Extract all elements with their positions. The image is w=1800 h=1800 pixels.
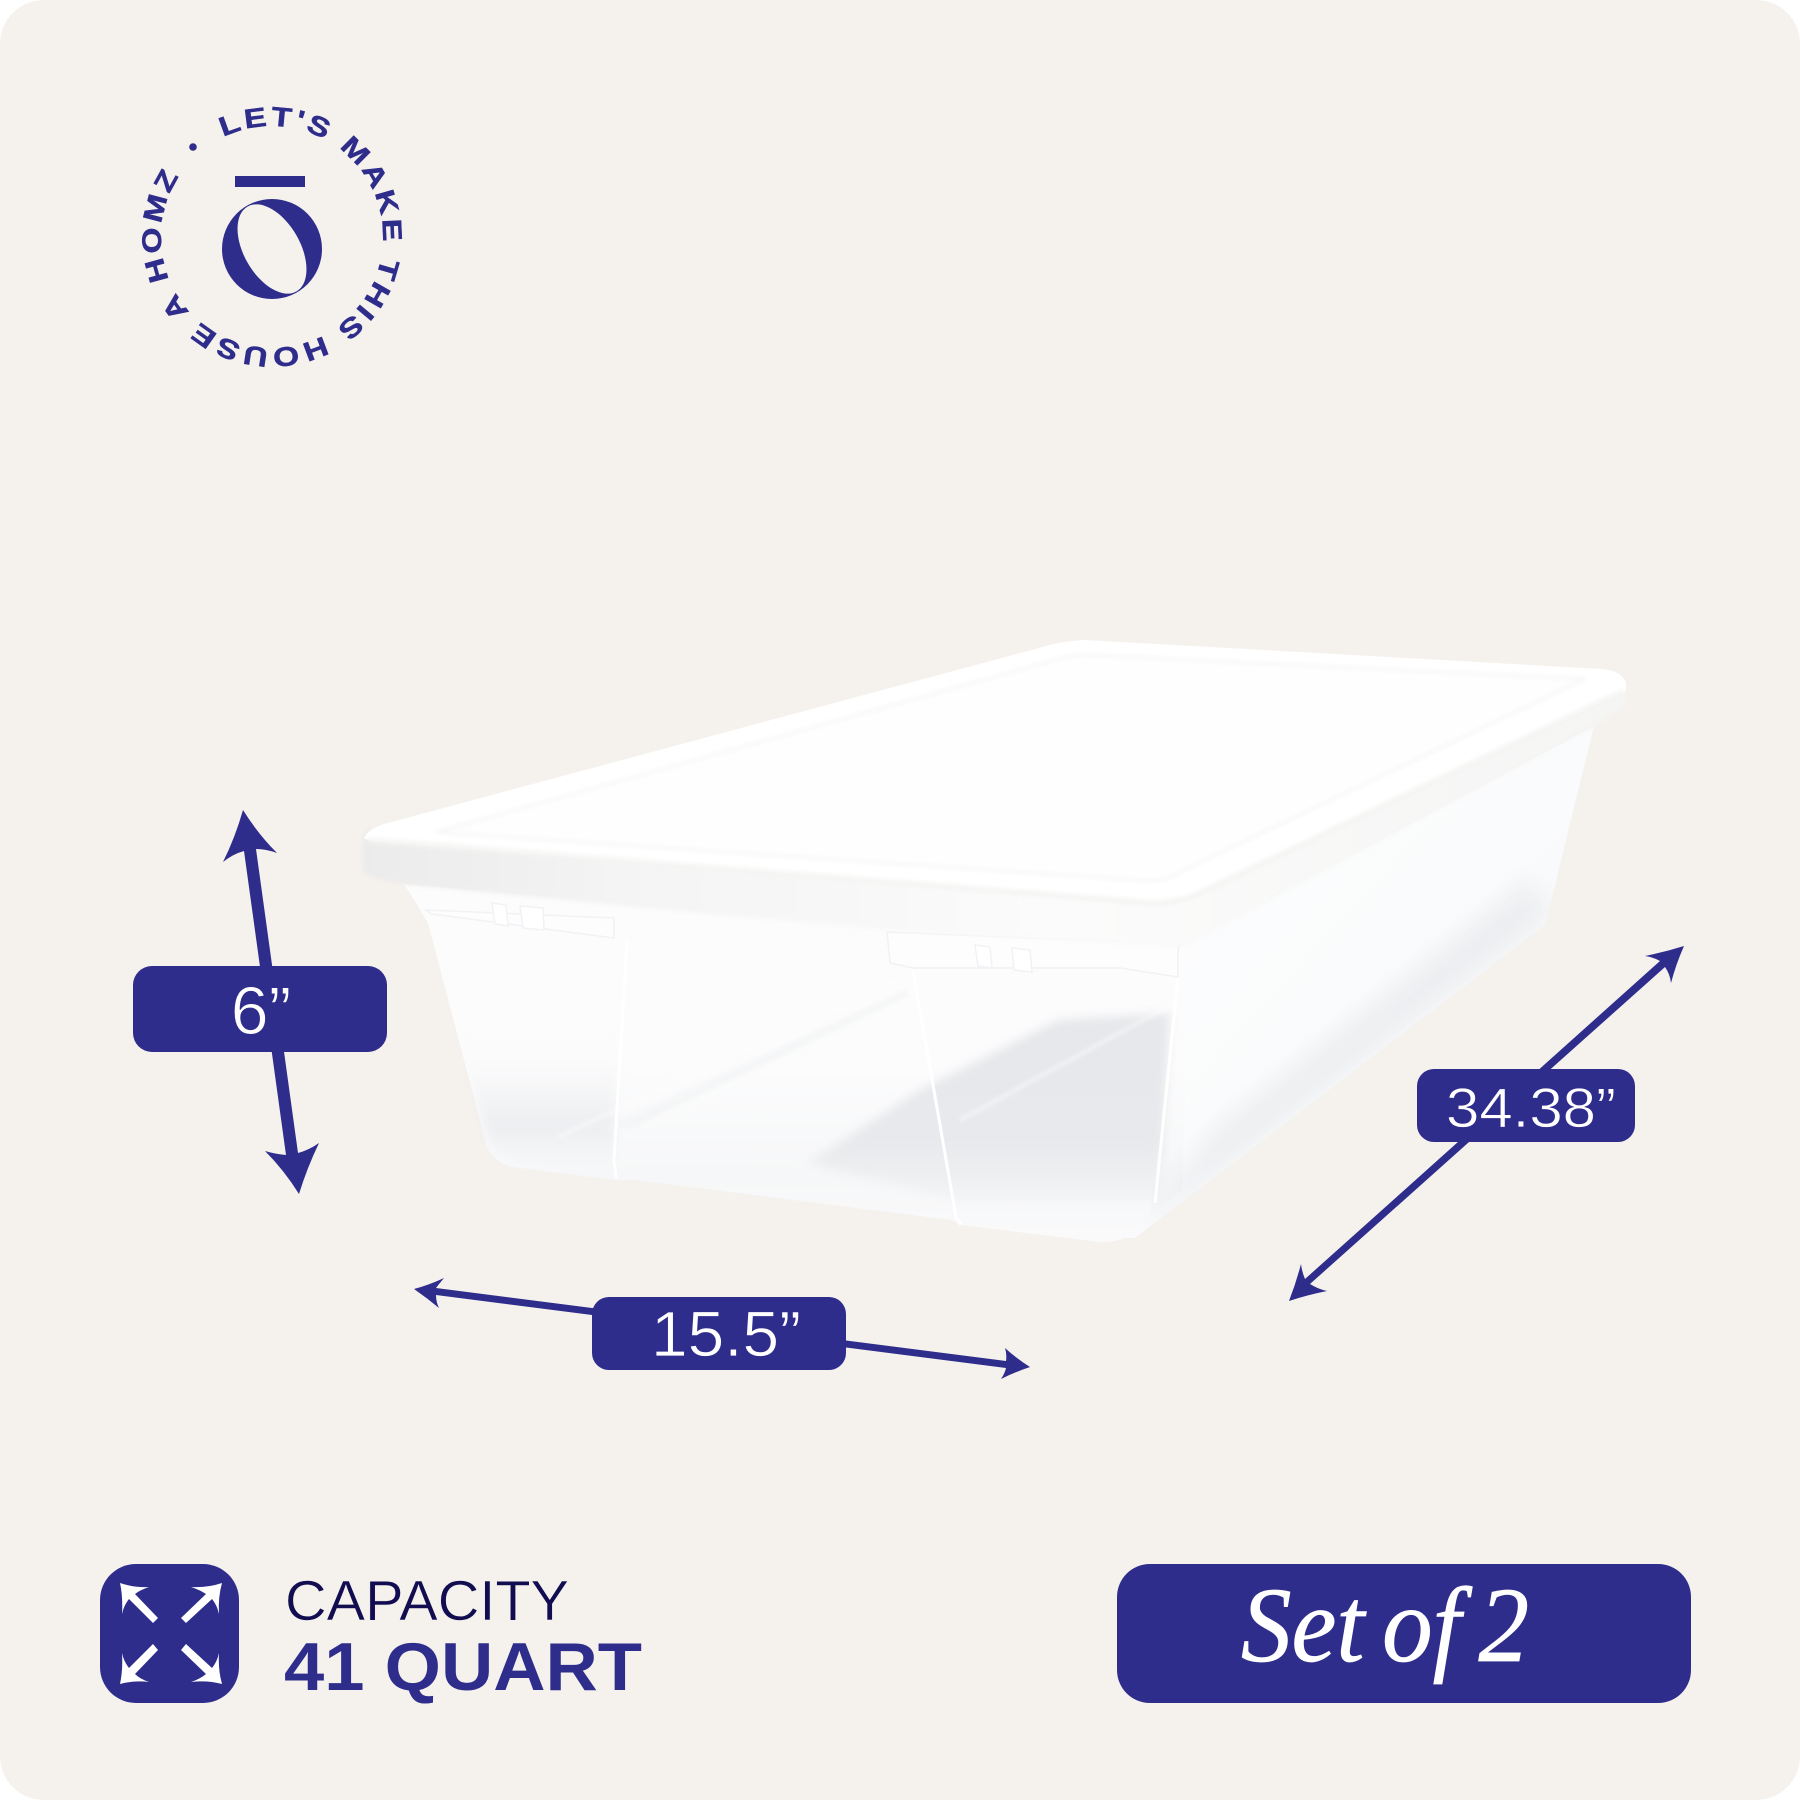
length label pill — [1417, 1069, 1635, 1142]
badge text: Set of 2 — [1241, 1567, 1529, 1685]
lid outer edge highlight — [368, 691, 1624, 903]
box body side face — [1124, 726, 1594, 1238]
capacity label: CAPACITY — [285, 1569, 569, 1633]
capacity value: 41 QUART — [284, 1629, 642, 1705]
badge pill — [1117, 1564, 1691, 1703]
logo: let's make this house a homz — [142, 106, 402, 368]
logo dot — [189, 143, 197, 151]
dimension: length 34.38 inches — [1289, 946, 1684, 1301]
width label pill — [592, 1297, 846, 1370]
box body front face — [403, 884, 1190, 1242]
height label text: 6” — [231, 973, 291, 1049]
front face interior shadow — [808, 1013, 1170, 1200]
dimension: height 6 inches — [133, 810, 387, 1194]
icon: expand arrows — [100, 1564, 239, 1703]
dimension: width 15.5 inches — [414, 1278, 1030, 1379]
height label pill — [133, 966, 387, 1052]
front face shading left panel — [445, 1000, 620, 1170]
height arrow — [223, 810, 319, 1194]
latch clips — [425, 910, 1178, 977]
interior diagonal ribs — [600, 990, 910, 1130]
capacity block — [100, 1564, 642, 1705]
length label text: 34.38” — [1446, 1076, 1616, 1139]
lid recessed panel — [436, 655, 1585, 881]
width arrow — [414, 1278, 1030, 1379]
product photo: clear storage box with white lid — [363, 640, 1626, 1242]
logo circular tagline: LET'S MAKE THIS HOUSE A HOMZ — [142, 106, 402, 368]
box corner seams — [614, 940, 1178, 1225]
set of 2 badge — [1117, 1564, 1691, 1703]
logo macron bar — [235, 176, 305, 187]
length arrow — [1289, 946, 1684, 1301]
logo letter o — [222, 193, 322, 305]
lid side band — [363, 690, 1626, 947]
width label text: 15.5” — [651, 1298, 801, 1370]
lid top surface — [364, 640, 1626, 903]
box bottom-right shadow — [1180, 892, 1539, 1193]
